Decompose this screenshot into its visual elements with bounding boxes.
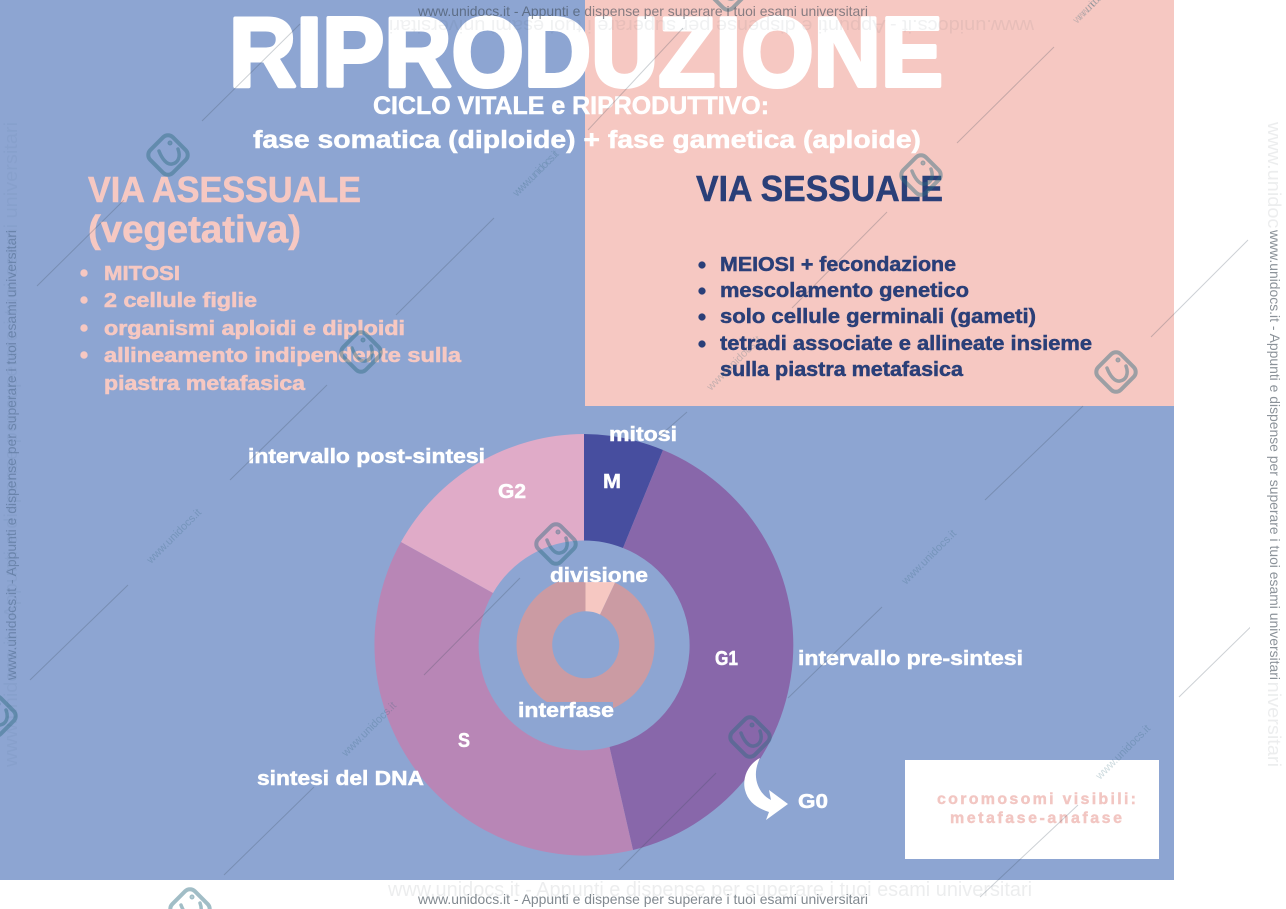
segment: G1	[610, 450, 793, 850]
list: via sessuale	[699, 254, 1092, 381]
list: via sessuale: tetradi associate e allineate insieme	[720, 333, 1092, 355]
callout: visible chromosomes: coromosomi visibili:	[937, 791, 1136, 808]
panel: via asessuale	[81, 169, 462, 395]
list: via asessuale: 2 cellule figlie	[104, 290, 257, 312]
list: via asessuale: organismi aploidi e diploidi	[104, 318, 405, 340]
segment: M	[584, 434, 663, 548]
chart labels: M	[603, 471, 621, 493]
subtitle: fase somatica (diploide) + fase gametica (aploide)	[253, 126, 921, 154]
chart labels: S	[458, 730, 470, 752]
infographic: www.unidocs.it	[339, 700, 399, 760]
panel: via sessuale	[696, 168, 1092, 381]
infographic: www.unidocs.it	[144, 507, 204, 567]
chart labels: G0	[798, 791, 828, 813]
chart: cell cycle outer donut	[374, 434, 793, 856]
infographic: www.unidocs.it	[899, 528, 959, 588]
callout: visible chromosomes	[905, 760, 1159, 859]
chart labels	[248, 424, 1023, 813]
list: via sessuale: mescolamento genetico	[720, 280, 969, 302]
watermark text: right	[1250, 121, 1286, 767]
heading: via asessuale: VIA ASESSUALE	[88, 169, 361, 210]
heading: via asessuale	[88, 169, 361, 251]
subtitle: CICLO VITALE e RIPRODUTTIVO:	[373, 92, 769, 120]
watermark text: right: www.unidocs.it - Appunti e dispense per superare i tuoi esami universitari	[1267, 229, 1283, 680]
list: via sessuale: solo cellule germinali (gameti)	[720, 306, 1036, 328]
watermark text: top	[389, 3, 1035, 36]
chart labels: intervallo pre-sintesi	[798, 648, 1023, 670]
chart labels: divisione	[550, 565, 648, 587]
chart labels: mitosi	[609, 424, 677, 446]
chart labels: G1	[715, 648, 738, 670]
chart labels: sintesi del DNA	[257, 768, 424, 790]
callout: visible chromosomes: metafase-anafase	[950, 810, 1122, 827]
segment: G2	[401, 434, 584, 593]
watermark text: top: www.unidocs.it - Appunti e dispense per superare i tuoi esami universitari	[417, 3, 868, 19]
infographic: www.unidocs.it	[510, 148, 562, 200]
infographic: www.unidocs.it	[704, 334, 764, 394]
chart labels: interfase	[518, 700, 614, 722]
watermark text: bottom: www.unidocs.it - Appunti e dispense per superare i tuoi esami universitari	[417, 891, 868, 907]
arrow: G1 to G0	[744, 758, 788, 820]
watermark text: bottom: www.unidocs.it - Appunti e dispense per superare i tuoi esami universitari	[387, 879, 1032, 901]
segment: interfase	[517, 576, 655, 714]
list: via sessuale: sulla piastra metafasica	[720, 359, 964, 381]
watermark text: top: www.unidocs.it - Appunti e dispense per superare i tuoi esami universitari	[389, 16, 1035, 36]
list: via asessuale: MITOSI	[104, 263, 180, 285]
list: via sessuale: MEIOSI + fecondazione	[720, 254, 956, 276]
segment: S	[374, 542, 633, 856]
watermark text: left: www.unidocs.it - Appunti e dispense per superare i tuoi esami universitari	[3, 230, 19, 681]
list: via asessuale	[81, 263, 462, 395]
heading: via asessuale: (vegetativa)	[88, 209, 301, 251]
list: via asessuale: allineamento indipendente sulla	[104, 345, 462, 367]
chart: inner donut division and interphase	[517, 566, 655, 718]
chart labels: intervallo post-sintesi	[248, 446, 485, 468]
watermark text: left: www.unidocs.it - Appunti e dispense per superare i tuoi esami universitari	[1, 122, 21, 768]
title: RIPRODUZIONE	[229, 0, 943, 107]
watermark text: right: www.unidocs.it - Appunti e dispense per superare i tuoi esami universitari	[1264, 121, 1284, 767]
panel: pink sexual pathway background	[585, 0, 1174, 406]
subtitle	[253, 92, 921, 154]
heading: via sessuale: VIA SESSUALE	[696, 168, 943, 209]
chart labels: G2	[498, 481, 526, 503]
segment: divisione	[586, 576, 615, 614]
list: via asessuale: piastra metafasica	[104, 373, 306, 395]
infographic: www.unidocs.it	[1093, 723, 1153, 783]
